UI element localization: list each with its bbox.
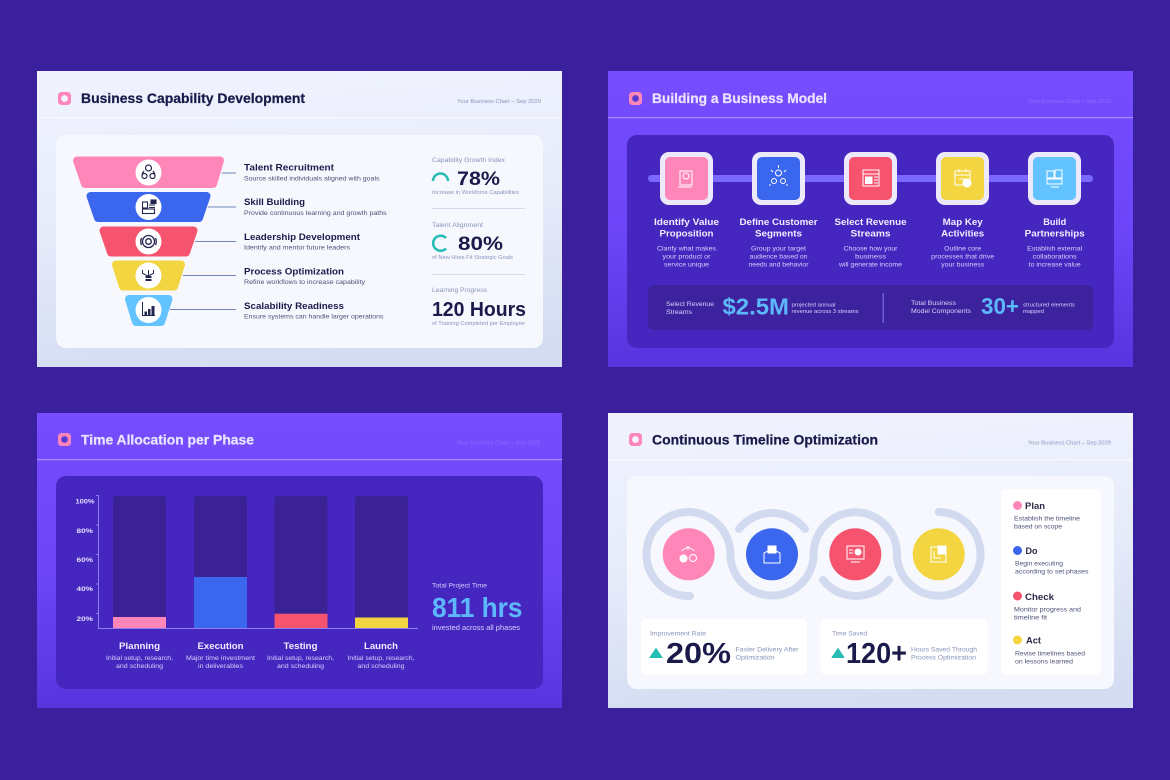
bar labels: Initial setup, research, (267, 655, 334, 662)
legend: PDCA: Plan (1025, 501, 1045, 511)
step: Map Key Activities: Map Key (943, 217, 984, 227)
funnel labels: Scalability Readiness (244, 301, 344, 312)
step: Select Revenue Streams (834, 152, 906, 268)
stats column: Learning Progress (432, 287, 487, 294)
funnel labels: Leadership Development (244, 232, 361, 243)
icon: header badge (58, 92, 71, 105)
bar labels: Planning (119, 641, 160, 651)
summary bar: 30+ (981, 293, 1019, 319)
icon: plan board (931, 546, 946, 562)
step: Select Revenue Streams: Choose how your (844, 246, 898, 252)
step: Define Customer Segments: Group your target (751, 246, 806, 252)
step: Map Key Activities: Activities (941, 228, 984, 238)
step: Select Revenue Streams: business (855, 254, 886, 260)
legend: PDCA: Begin executing (1015, 560, 1064, 568)
bar labels: Major time investment (186, 655, 255, 662)
step: Build Partnerships: to increase value (1029, 262, 1081, 268)
heading: Time Allocation per Phase (81, 432, 254, 448)
icon: header badge (629, 92, 642, 105)
funnel labels: Source skilled individuals aligned with goals (244, 176, 380, 182)
stat: improvement rate: 20% (666, 638, 731, 670)
step: Identify Value Proposition: Proposition (660, 228, 714, 238)
funnel labels: Ensure systems can handle larger operations (244, 314, 384, 320)
bar labels: in deliverables (198, 663, 243, 670)
stat: time saved: Time Saved (832, 632, 867, 638)
date label: Your Business Chart – Sep 2029 (457, 99, 541, 105)
funnel labels: Provide continuous learning and growth paths (244, 210, 387, 217)
icon: talent (142, 165, 155, 178)
step: Build Partnerships: Establish external (1027, 246, 1082, 252)
step: Identify Value Proposition (654, 152, 719, 268)
stat: time saved (820, 619, 988, 675)
icon: header badge (58, 433, 71, 446)
date label: Your Business Chart – Sep 2029 (1028, 440, 1111, 446)
bar chart: 60% (76, 557, 93, 564)
card (627, 135, 1114, 348)
stats column: 120 Hours (432, 299, 526, 321)
legend: PDCA (1001, 489, 1101, 675)
step: Define Customer Segments: needs and behavior (748, 262, 808, 268)
process track (648, 175, 1093, 182)
funnel labels: Refine workflows to increase capability (244, 279, 366, 286)
step: Map Key Activities: Outline core (944, 246, 982, 252)
legend: PDCA: according to set phases (1015, 568, 1088, 576)
stats column (432, 157, 526, 327)
heading: Building a Business Model (652, 90, 827, 106)
heading: Continuous Timeline Optimization (652, 432, 878, 448)
step: Identify Value Proposition: Identify Value (654, 217, 719, 227)
funnel labels: Process Optimization (244, 266, 344, 278)
step: Define Customer Segments (740, 152, 818, 268)
summary bar: revenue across 3 streams (792, 309, 859, 315)
summary bar: Total Business (911, 300, 957, 307)
summary bar: projected annual (792, 302, 836, 308)
step: Build Partnerships: Build (1043, 217, 1066, 227)
stats column: Talent Alignment (432, 222, 483, 229)
funnel chart (77, 160, 236, 323)
bar chart: 20% (76, 616, 93, 623)
date label: Your Business Chart – Sep 2029 (457, 440, 540, 446)
bar labels: Execution (198, 641, 244, 651)
summary bar: Select Revenue (666, 301, 714, 308)
bar labels: Testing (284, 641, 318, 651)
legend: PDCA: based on scope (1014, 524, 1063, 530)
summary bar: mapped (1023, 309, 1044, 315)
callout: total project time: invested across all phases (432, 625, 521, 632)
bar chart: 80% (76, 528, 93, 535)
legend: PDCA: Establish the timeline (1014, 516, 1081, 522)
step: Define Customer Segments: Segments (755, 228, 802, 238)
legend: PDCA: Do (1026, 546, 1038, 556)
bar labels: and scheduling (358, 663, 405, 670)
step: Define Customer Segments: Define Customer (740, 217, 818, 227)
stat: improvement rate: Faster Delivery After (736, 646, 798, 654)
callout: total project time (432, 582, 522, 632)
bar labels: Initial setup, research, (348, 655, 415, 662)
stats column: Capability Growth Index (432, 157, 506, 164)
icon: header badge (629, 433, 642, 446)
stat: improvement rate: Optimization (736, 654, 775, 662)
cycle diagram (646, 512, 981, 596)
legend: PDCA: on lessons learned (1015, 658, 1074, 666)
step: Build Partnerships: collaborations (1033, 254, 1077, 260)
card (56, 476, 543, 689)
stat: improvement rate (641, 619, 807, 675)
stats column: of New Hires Fit Strategic Goals (432, 255, 513, 261)
summary bar (648, 285, 1093, 330)
legend: PDCA: timeline fit (1014, 614, 1047, 622)
step: Select Revenue Streams: Select Revenue (834, 217, 906, 227)
icon: scalability (142, 302, 155, 316)
bar labels: Launch (364, 641, 398, 651)
legend: PDCA: Monitor progress and (1014, 606, 1082, 614)
step: Map Key Activities: your business (941, 262, 984, 268)
bar chart: 100% (76, 498, 94, 506)
stats column: 78% (457, 168, 500, 190)
summary bar: structured elements (1023, 302, 1075, 308)
step: Build Partnerships (1025, 152, 1085, 268)
step: Select Revenue Streams: will generate income (838, 262, 903, 268)
card (56, 135, 543, 348)
step: Build Partnerships: Partnerships (1025, 228, 1085, 238)
step: Identify Value Proposition: service unique (664, 262, 710, 268)
icon: monitor (847, 546, 864, 562)
legend: PDCA: Check (1025, 592, 1055, 602)
stats column: of Training Completed per Employee (432, 321, 525, 327)
legend: PDCA: Revise timelines based (1015, 650, 1086, 658)
bar chart: 40% (76, 586, 93, 593)
summary bar: Streams (666, 309, 693, 316)
step: Map Key Activities: processes that drive (931, 254, 995, 260)
callout: total project time: Total Project Time (432, 582, 487, 590)
icon: balance (680, 546, 696, 562)
funnel labels: Identify and mentor future leaders (244, 244, 350, 252)
funnel labels: Talent Recruitment (244, 162, 335, 174)
summary bar: $2.5M (722, 294, 789, 320)
date label: Your Business Chart – Sep 2029 (1028, 99, 1111, 105)
funnel labels (244, 162, 387, 320)
bar chart (76, 495, 418, 628)
heading: Business Capability Development (81, 90, 305, 106)
step: Select Revenue Streams: Streams (850, 228, 890, 238)
bar labels: Initial setup, research, (106, 655, 173, 662)
stat: time saved: Hours Saved Through (911, 646, 978, 654)
icon: process (142, 270, 154, 281)
panel: Time Allocation per Phase (37, 413, 562, 708)
stat: time saved: Process Optimization (911, 654, 977, 662)
stat: time saved: 120+ (846, 638, 907, 670)
bar labels: and scheduling (277, 663, 325, 670)
panel: Continuous Timeline Optimization (608, 413, 1133, 708)
stats column: Increase in Workforce Capabilities (432, 190, 519, 196)
step: Identify Value Proposition: Clarify what makes (657, 246, 716, 252)
icon: skill (142, 200, 156, 214)
panel: Building a Business Model (608, 71, 1133, 367)
stats column: 80% (458, 233, 503, 255)
stat: improvement rate: Improvement Rate (650, 632, 707, 638)
step: Identify Value Proposition: your product or (662, 254, 710, 260)
step: Map Key Activities (931, 152, 995, 268)
callout: total project time: 811 hrs (432, 592, 522, 623)
step: Define Customer Segments: audience based on (750, 254, 808, 260)
legend: PDCA: Act (1026, 636, 1041, 646)
panel: Business Capability Development (37, 71, 562, 367)
funnel labels: Skill Building (244, 197, 305, 208)
bar labels (106, 641, 415, 670)
icon: inbox (764, 546, 780, 563)
card (627, 476, 1114, 689)
bar labels: and scheduling (116, 663, 164, 670)
summary bar: Model Components (911, 308, 972, 315)
icon: leadership (141, 236, 156, 248)
